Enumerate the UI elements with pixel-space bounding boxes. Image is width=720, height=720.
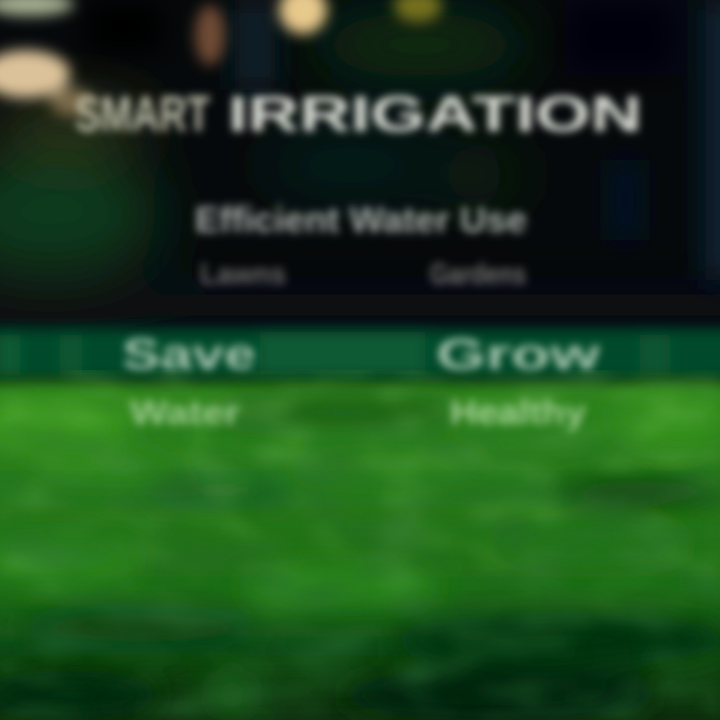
title: SMART [75, 86, 210, 142]
subtitle labels: Gardens [430, 258, 526, 291]
subtitle: Efficient Water Use [195, 199, 527, 240]
background: lawn [0, 370, 720, 720]
feature detail: right: Healthy [450, 394, 586, 432]
title [75, 86, 642, 142]
background: teal green band [0, 328, 720, 380]
subtitle labels: Lawns [200, 258, 286, 291]
subtitle labels [200, 258, 526, 291]
title: IRRIGATION [228, 86, 642, 142]
feature detail: left: Water [130, 394, 240, 432]
feature heading: left: Save [122, 330, 256, 379]
background: dark garden scene [0, 0, 720, 340]
feature heading: right: Grow [436, 330, 601, 379]
